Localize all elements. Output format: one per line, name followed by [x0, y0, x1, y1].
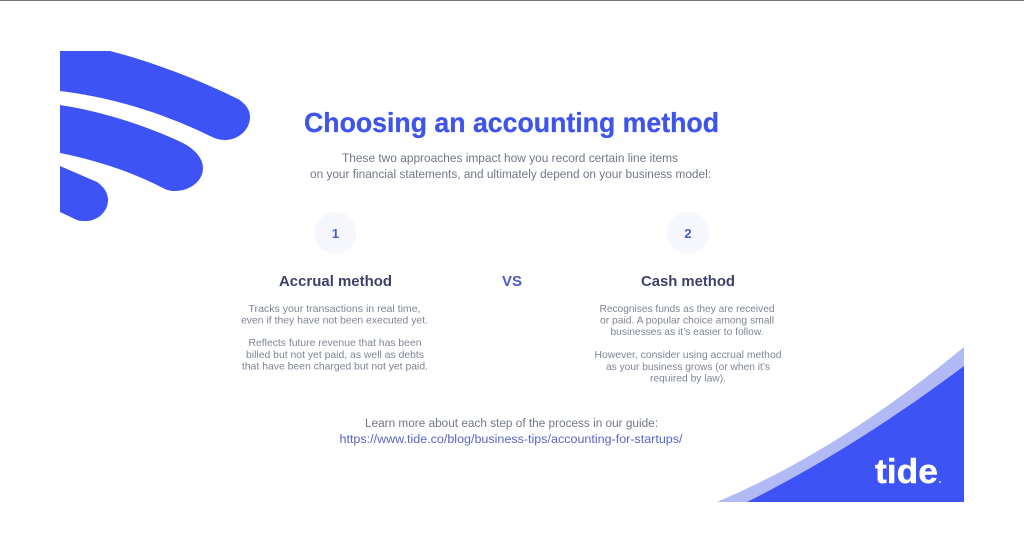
intro text: These two approaches impact how you record certain line items — [342, 151, 678, 165]
cash description: businesses as it’s easier to follow. — [610, 327, 764, 338]
accrual description: Reflects future revenue that has been — [248, 338, 422, 349]
decorative blue arcs, top left — [60, 51, 250, 221]
guide call to action: https://www.tide.co/blog/business-tips/accounting-for-startups/ — [340, 432, 683, 446]
accrual description: even if they have not been executed yet. — [241, 316, 428, 326]
heading: cash method: Cash method — [641, 274, 735, 290]
cash description — [594, 304, 782, 384]
intro text — [310, 151, 711, 181]
cash description: as your business grows (or when it’s — [606, 362, 770, 373]
panel: accrual method — [241, 212, 428, 372]
vs label: VS — [502, 274, 522, 290]
accrual description: that have been charged but not yet paid. — [242, 362, 428, 372]
accrual description — [241, 304, 428, 372]
number badge 2: 2 — [684, 226, 692, 241]
heading: accrual method: Accrual method — [279, 274, 392, 290]
number badge 1: 1 — [332, 226, 339, 241]
guide call to action — [340, 416, 683, 446]
corner swoosh with tide logo — [717, 347, 964, 502]
accrual description: Tracks your transactions in real time, — [248, 304, 420, 315]
tide logo: tide — [875, 453, 938, 491]
cash description: Recognises funds as they are received — [600, 304, 775, 315]
cash description: However, consider using accrual method — [594, 350, 782, 361]
accrual description: billed but not yet paid, as well as debts — [246, 350, 424, 361]
title: Choosing an accounting method — [304, 107, 719, 138]
cash description: or paid. A popular choice among small — [600, 316, 774, 326]
guide call to action: Learn more about each step of the process in our guide: — [365, 416, 658, 430]
number badge 2 — [667, 212, 709, 254]
cash description: required by law). — [650, 374, 726, 384]
number badge 1 — [314, 212, 356, 254]
panel: cash method — [594, 212, 782, 384]
intro text: on your financial statements, and ultimately depend on your business model: — [310, 167, 711, 181]
